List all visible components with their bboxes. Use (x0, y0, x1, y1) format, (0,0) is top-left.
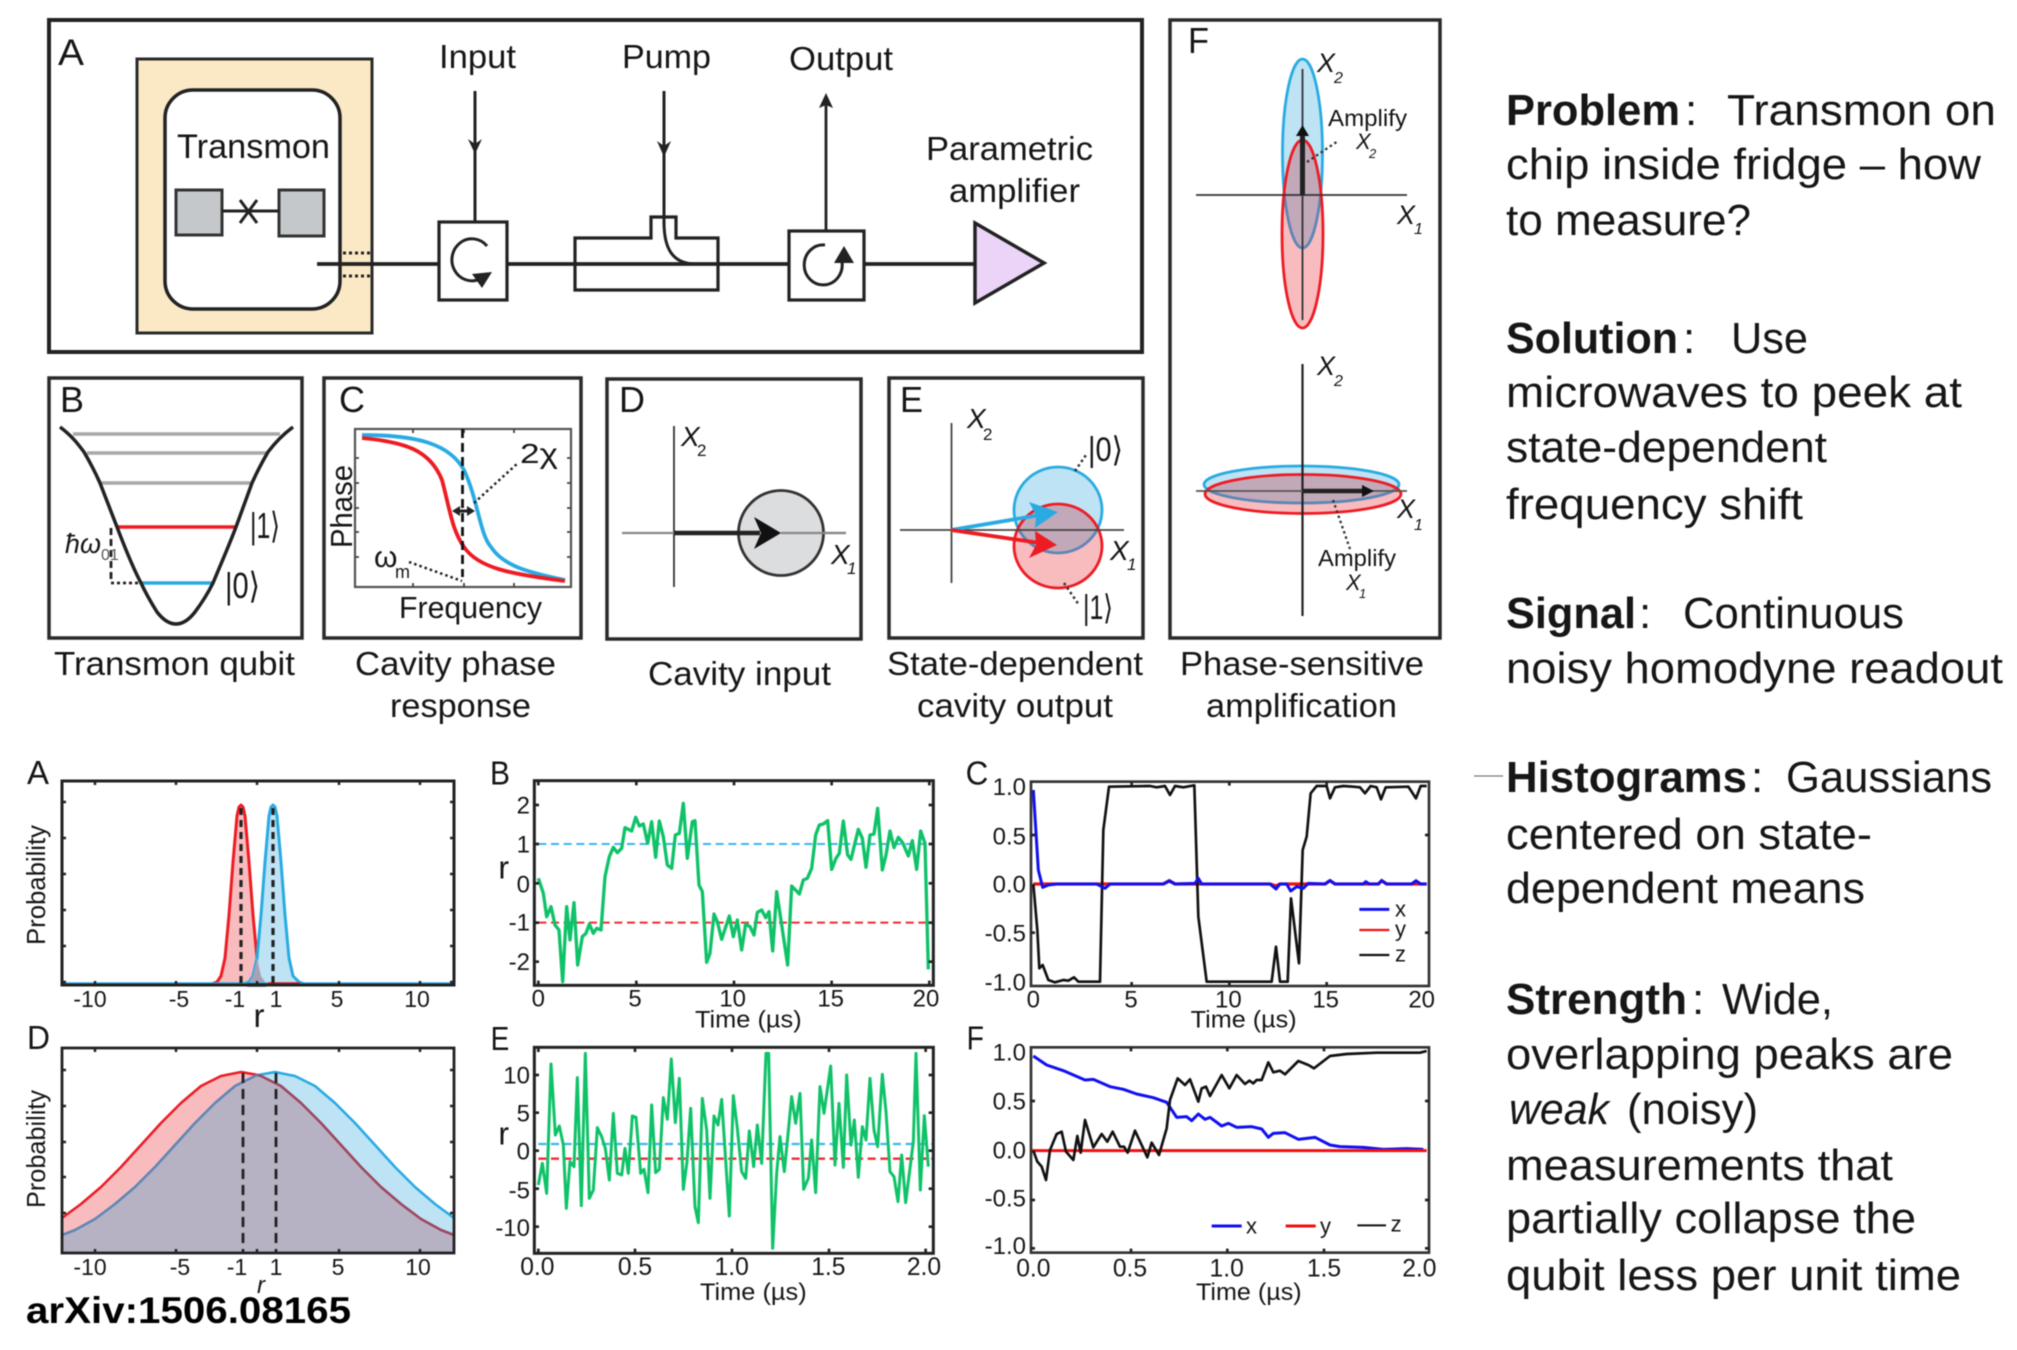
y tick labels: 0.0 (993, 1137, 1026, 1164)
x tick labels: -5 (170, 1254, 190, 1280)
dashed means (243, 1073, 276, 1253)
red y trace (1031, 1146, 1427, 1155)
label X1: 1 (847, 559, 856, 578)
curve outlines (62, 1072, 454, 1235)
text block: Histograms: centered on state- (1506, 810, 1872, 859)
transmission line (317, 262, 975, 266)
panel letter B: B (60, 379, 84, 420)
text block: Strength: partially collapse the (1506, 1194, 1916, 1243)
leader tick before Histograms (1474, 775, 1503, 777)
text block: Histograms: : (1751, 753, 1763, 802)
blue x trace (1033, 1056, 1423, 1149)
caption Cavity phase response: Cavity phase (355, 645, 556, 682)
x tick labels: 2.0 (1402, 1256, 1436, 1283)
icon: josephson junction (176, 190, 324, 236)
label bottom X1 axis (1396, 494, 1423, 534)
chart D: wide histograms (21, 1019, 454, 1299)
x tick labels (520, 1254, 941, 1281)
text block: Histograms: dependent means (1506, 864, 1865, 913)
y tick labels: 2 (517, 792, 530, 819)
caption Transmon qubit: Transmon qubit (54, 645, 295, 682)
x tick labels: 5 (1124, 987, 1138, 1014)
energy levels (73, 434, 280, 583)
text block: Histograms (1506, 753, 1992, 913)
label Amplify X2: 2 (1368, 146, 1377, 161)
chart E: weak measurement trace (491, 1021, 941, 1306)
x tick labels: 0 (1027, 987, 1040, 1014)
x tick labels (73, 1254, 431, 1280)
double arrow 2 chi (452, 506, 475, 516)
x tick labels: 0 (532, 986, 545, 1013)
y tick labels (509, 792, 530, 976)
label 2 chi: 2χ (520, 438, 558, 469)
x tick labels: -10 (73, 1254, 107, 1280)
y tick labels: 10 (503, 1062, 530, 1089)
overlap (62, 1075, 454, 1253)
panel B: transmon qubit well (49, 378, 302, 638)
text block: Strength: overlapping peaks are (1506, 1030, 1953, 1079)
caption State-dependent cavity output: State-dependent (887, 645, 1143, 682)
legend (1212, 1212, 1402, 1238)
panel A: measurement circuit (49, 20, 1142, 352)
y tick labels: 5 (517, 1101, 530, 1128)
x tick labels: 1.5 (811, 1254, 845, 1281)
y tick labels: 0 (517, 871, 530, 898)
blue gaussian (243, 805, 305, 984)
label Amplify X2: X (1355, 129, 1372, 154)
label ket 1: |1⟩ (250, 505, 280, 546)
label X2: X (966, 403, 987, 434)
label Frequency: Frequency (399, 590, 542, 625)
y tick labels (495, 1062, 530, 1242)
baseline (62, 984, 454, 985)
caption Cavity phase response (355, 645, 556, 724)
label Time: Time (µs) (700, 1279, 807, 1306)
text block: Signal: : (1639, 589, 1651, 638)
red gaussian (211, 805, 271, 984)
caption State-dependent cavity output (887, 645, 1143, 724)
arrow: blue state (951, 502, 1058, 530)
legend: z (1391, 1212, 1402, 1237)
text block: Strength: (noisy) (1627, 1085, 1758, 1134)
x tick labels: 1.5 (1307, 1256, 1341, 1283)
cream chip box (137, 59, 372, 333)
panel letter C: C (339, 379, 365, 420)
y tick labels: -10 (495, 1215, 530, 1242)
label Amplify X1: X (1345, 570, 1362, 595)
label Amplify X2 (1328, 105, 1408, 161)
text block: Signal: Signal (1506, 589, 1636, 638)
x tick labels (532, 986, 939, 1013)
label X2: 2 (697, 441, 706, 460)
bottom ellipses (1204, 466, 1401, 514)
x tick labels: 0.0 (1016, 1256, 1050, 1283)
label top X2 axis (1316, 48, 1343, 87)
label hbar omega: 01 (101, 547, 119, 564)
x tick labels: 5 (331, 986, 343, 1012)
y tick labels: 0.5 (993, 823, 1026, 850)
chart F: weak measurement trajectories (967, 1020, 1436, 1306)
panel letter E: E (900, 379, 923, 420)
blue x trace (1033, 790, 1427, 891)
label X1: X (830, 539, 851, 570)
text block: Strength: qubit less per unit time (1506, 1251, 1961, 1300)
bottom axes (1301, 364, 1304, 616)
pump T-junction (575, 217, 718, 290)
x tick labels: -10 (73, 986, 107, 1012)
y tick labels: -2 (509, 949, 530, 976)
label bottom X2 axis: X (1316, 351, 1336, 381)
output circulator (789, 231, 864, 300)
caption Phase-sensitive amplification (1180, 645, 1424, 724)
label X2: X (680, 421, 701, 452)
panel letter A: A (27, 754, 49, 791)
y tick labels: 0.0 (993, 872, 1026, 899)
chart A: narrow histograms (21, 754, 454, 1034)
label X2 (680, 421, 706, 460)
label hbar omega: ħω (65, 528, 101, 559)
panel letter D: D (27, 1019, 50, 1056)
y tick labels: -0.5 (985, 1186, 1026, 1213)
overlap (249, 958, 265, 982)
frame and ticks (534, 781, 933, 985)
x tick labels: 2.0 (907, 1254, 941, 1281)
label top X1 axis (1396, 200, 1423, 238)
panel letter A: A (58, 32, 84, 73)
label Time: Time (µs) (1191, 1007, 1297, 1034)
text block: Strength: Strength (1506, 975, 1687, 1024)
y tick labels: 1.0 (993, 1040, 1026, 1067)
x tick labels: -1 (225, 986, 245, 1012)
text block: Problem: chip inside fridge – how (1506, 140, 1981, 189)
panel F: phase-sensitive amplification (1170, 20, 1440, 638)
label X1 (830, 539, 856, 578)
text block: Solution (1506, 314, 1962, 529)
label omega m: ω (374, 541, 397, 574)
label top X2 axis: 2 (1333, 70, 1343, 87)
x tick labels: 1.0 (1210, 1256, 1244, 1283)
black z trace (1033, 785, 1427, 982)
label X1: X (1109, 535, 1130, 566)
text block: Solution: Solution (1506, 314, 1678, 363)
x tick labels: 5 (332, 1254, 344, 1280)
reference lines (538, 844, 932, 923)
text block: Solution: microwaves to peek at (1506, 368, 1962, 417)
label bottom X1 axis: 1 (1414, 517, 1423, 534)
legend: z (1395, 942, 1406, 967)
panel letter C: C (966, 755, 988, 792)
label r: r (498, 1115, 509, 1151)
text block: Histograms: Gaussians (1786, 753, 1992, 802)
reference lines (538, 1144, 932, 1159)
text block: Strength: Wide, (1722, 975, 1833, 1024)
x tick labels: 20 (1408, 987, 1435, 1014)
dashed center frequency (461, 429, 464, 577)
dotted leaders (409, 463, 518, 581)
top dotted leader (1307, 141, 1338, 162)
y tick labels: 1.0 (993, 774, 1026, 801)
label Pump: Pump (622, 38, 711, 75)
y tick labels: -5 (509, 1177, 530, 1204)
label Probability: Probability (21, 1090, 51, 1208)
text block: Strength: : (1692, 975, 1704, 1024)
panel E: state-dependent cavity output (889, 378, 1143, 638)
text block: Signal: Continuous (1683, 589, 1904, 638)
panel C: cavity phase response (324, 378, 581, 638)
chart B: strong measurement trace (490, 755, 939, 1034)
dotted coupling lines (343, 253, 370, 276)
axes (900, 423, 1124, 583)
arrow: input displacement (674, 517, 781, 549)
panel letter F: F (1188, 20, 1209, 61)
label r: r (257, 1272, 266, 1299)
text block: Problem: Transmon on (1727, 86, 1996, 135)
red gaussian (62, 1072, 258, 1253)
bottom dotted leader (1333, 500, 1350, 549)
y tick labels: 0 (517, 1138, 530, 1165)
text block: Solution: Use (1731, 314, 1808, 363)
x tick labels: 10 (404, 986, 430, 1012)
text block: Strength: weak (1509, 1085, 1611, 1134)
label Parametric amplifier: Parametric (926, 130, 1093, 167)
label r: r (498, 849, 509, 885)
x tick labels: 1 (270, 986, 282, 1012)
x tick labels: 10 (405, 1254, 431, 1280)
text block: Signal: noisy homodyne readout (1506, 644, 2003, 693)
label top X1 axis: 1 (1414, 221, 1423, 238)
label Amplify X1 (1318, 545, 1397, 601)
label omega m: m (395, 562, 410, 582)
x tick labels (1016, 1256, 1436, 1283)
text block: Solution: state-dependent (1506, 423, 1827, 472)
label ket 0: |0⟩ (225, 565, 260, 606)
inner plot frame (355, 429, 571, 587)
citation arXiv: arXiv:1506.08165 (26, 1290, 351, 1331)
legend (1359, 897, 1406, 967)
blue gaussian (258, 1072, 454, 1253)
y tick labels: -0.5 (985, 921, 1026, 948)
frame and ticks (62, 781, 454, 985)
label X2 (966, 403, 992, 444)
caption Cavity input: Cavity input (648, 655, 831, 692)
label Parametric amplifier (926, 130, 1093, 209)
label bottom X2 axis (1316, 351, 1343, 390)
frame and ticks (1031, 1047, 1429, 1253)
label Amplify X2: Amplify (1328, 105, 1408, 131)
chart C: strong measurement trajectories (966, 755, 1435, 1034)
dotted leaders (1064, 455, 1086, 605)
label ket 0: |0⟩ (1088, 431, 1123, 469)
legend: x (1246, 1213, 1257, 1238)
y tick labels: 0.5 (993, 1088, 1026, 1115)
text block: Problem (1506, 86, 1996, 245)
label Transmon: Transmon (177, 128, 330, 166)
text block: Signal (1506, 589, 2003, 693)
frame and ticks (62, 1048, 454, 1253)
potential well curve (60, 427, 293, 624)
caption Phase-sensitive amplification: Phase-sensitive (1180, 645, 1424, 682)
y tick labels (985, 1040, 1026, 1260)
panel letter B: B (490, 755, 510, 792)
green trace (538, 1053, 928, 1248)
black z trace (1033, 1051, 1427, 1180)
panel D: cavity input (607, 379, 861, 639)
x tick labels: 1.0 (715, 1254, 749, 1281)
label hbar omega (65, 528, 119, 564)
y tick labels: -1.0 (985, 1233, 1026, 1260)
label Amplify X1: Amplify (1318, 545, 1397, 571)
x tick labels: 0.0 (520, 1254, 554, 1281)
text block: Problem: Problem (1506, 86, 1680, 135)
caption Cavity phase response: response (390, 687, 531, 724)
label X2: 2 (983, 425, 992, 444)
label Parametric amplifier: amplifier (949, 172, 1080, 209)
panel letter F: F (967, 1020, 984, 1057)
x tick labels: 15 (1312, 987, 1339, 1014)
text block: Problem: : (1685, 86, 1697, 135)
input circulator (439, 222, 507, 300)
label top X1 axis: X (1396, 200, 1416, 230)
arrow: pump (657, 91, 671, 225)
label ket 1: |1⟩ (1083, 589, 1113, 627)
axes (622, 426, 846, 587)
label Amplify X1: 1 (1359, 586, 1366, 601)
dashed level gap (110, 528, 112, 583)
y tick labels: -1.0 (985, 970, 1026, 997)
text block: Solution: : (1683, 314, 1695, 363)
frame and ticks (1031, 782, 1429, 986)
arrow: input (468, 91, 482, 222)
label r: r (254, 997, 264, 1034)
arrow: red state (951, 530, 1057, 558)
x tick labels: -1 (227, 1254, 247, 1280)
x tick labels: 10 (1215, 987, 1242, 1014)
x tick labels: 1 (270, 1254, 282, 1280)
y tick labels: -1 (509, 910, 530, 937)
green trace (538, 803, 928, 982)
legend: y (1320, 1213, 1331, 1238)
legend: x (1395, 897, 1406, 922)
text block: Strength (1506, 975, 1961, 1300)
top ellipses (1282, 59, 1323, 328)
text block: Histograms: Histograms (1506, 753, 1747, 802)
red y trace (1033, 881, 1427, 886)
x tick labels (73, 986, 430, 1012)
x tick labels (1027, 987, 1435, 1014)
text block: Solution: frequency shift (1506, 480, 1803, 529)
caption Phase-sensitive amplification: amplification (1206, 687, 1397, 724)
label bottom X1 axis: X (1396, 494, 1416, 524)
label X1: 1 (1127, 555, 1136, 574)
top axes (1196, 69, 1407, 320)
label Input: Input (439, 38, 516, 75)
transmon rounded box (165, 90, 340, 309)
y tick labels (985, 774, 1026, 997)
cavity state circle (738, 490, 824, 576)
x tick labels: 0.5 (1113, 1256, 1147, 1283)
x tick labels: 0.5 (618, 1254, 652, 1281)
x tick labels: 10 (719, 986, 746, 1013)
panel letter E: E (491, 1021, 509, 1058)
phase curves (362, 435, 565, 581)
text block: Strength: measurements that (1506, 1141, 1893, 1190)
x tick labels: 20 (913, 986, 939, 1013)
label Output: Output (789, 40, 893, 77)
label Phase: Phase (324, 465, 359, 548)
frame and ticks (534, 1047, 933, 1253)
text block: Problem: to measure? (1506, 196, 1751, 245)
label Time: Time (µs) (695, 1007, 802, 1034)
dashed means (241, 808, 273, 984)
panel letter D: D (619, 379, 645, 420)
label Time: Time (µs) (1196, 1279, 1302, 1306)
x tick labels: 15 (817, 986, 844, 1013)
arrow: amplified X2 (1296, 125, 1309, 195)
state circles (1014, 467, 1102, 588)
arrow: amplified X1 (1302, 485, 1374, 497)
legend: y (1395, 917, 1406, 942)
label omega m (374, 541, 410, 582)
caption State-dependent cavity output: cavity output (917, 687, 1113, 724)
label X1 (1109, 535, 1136, 574)
label bottom X2 axis: 2 (1333, 373, 1343, 390)
label top X2 axis: X (1316, 48, 1336, 78)
icon: parametric amplifier triangle (975, 223, 1044, 303)
x tick labels: -5 (169, 986, 189, 1012)
x tick labels: 5 (628, 986, 642, 1013)
label Probability: Probability (21, 825, 51, 945)
y tick labels: 1 (517, 831, 530, 858)
arrow: output (819, 93, 833, 231)
